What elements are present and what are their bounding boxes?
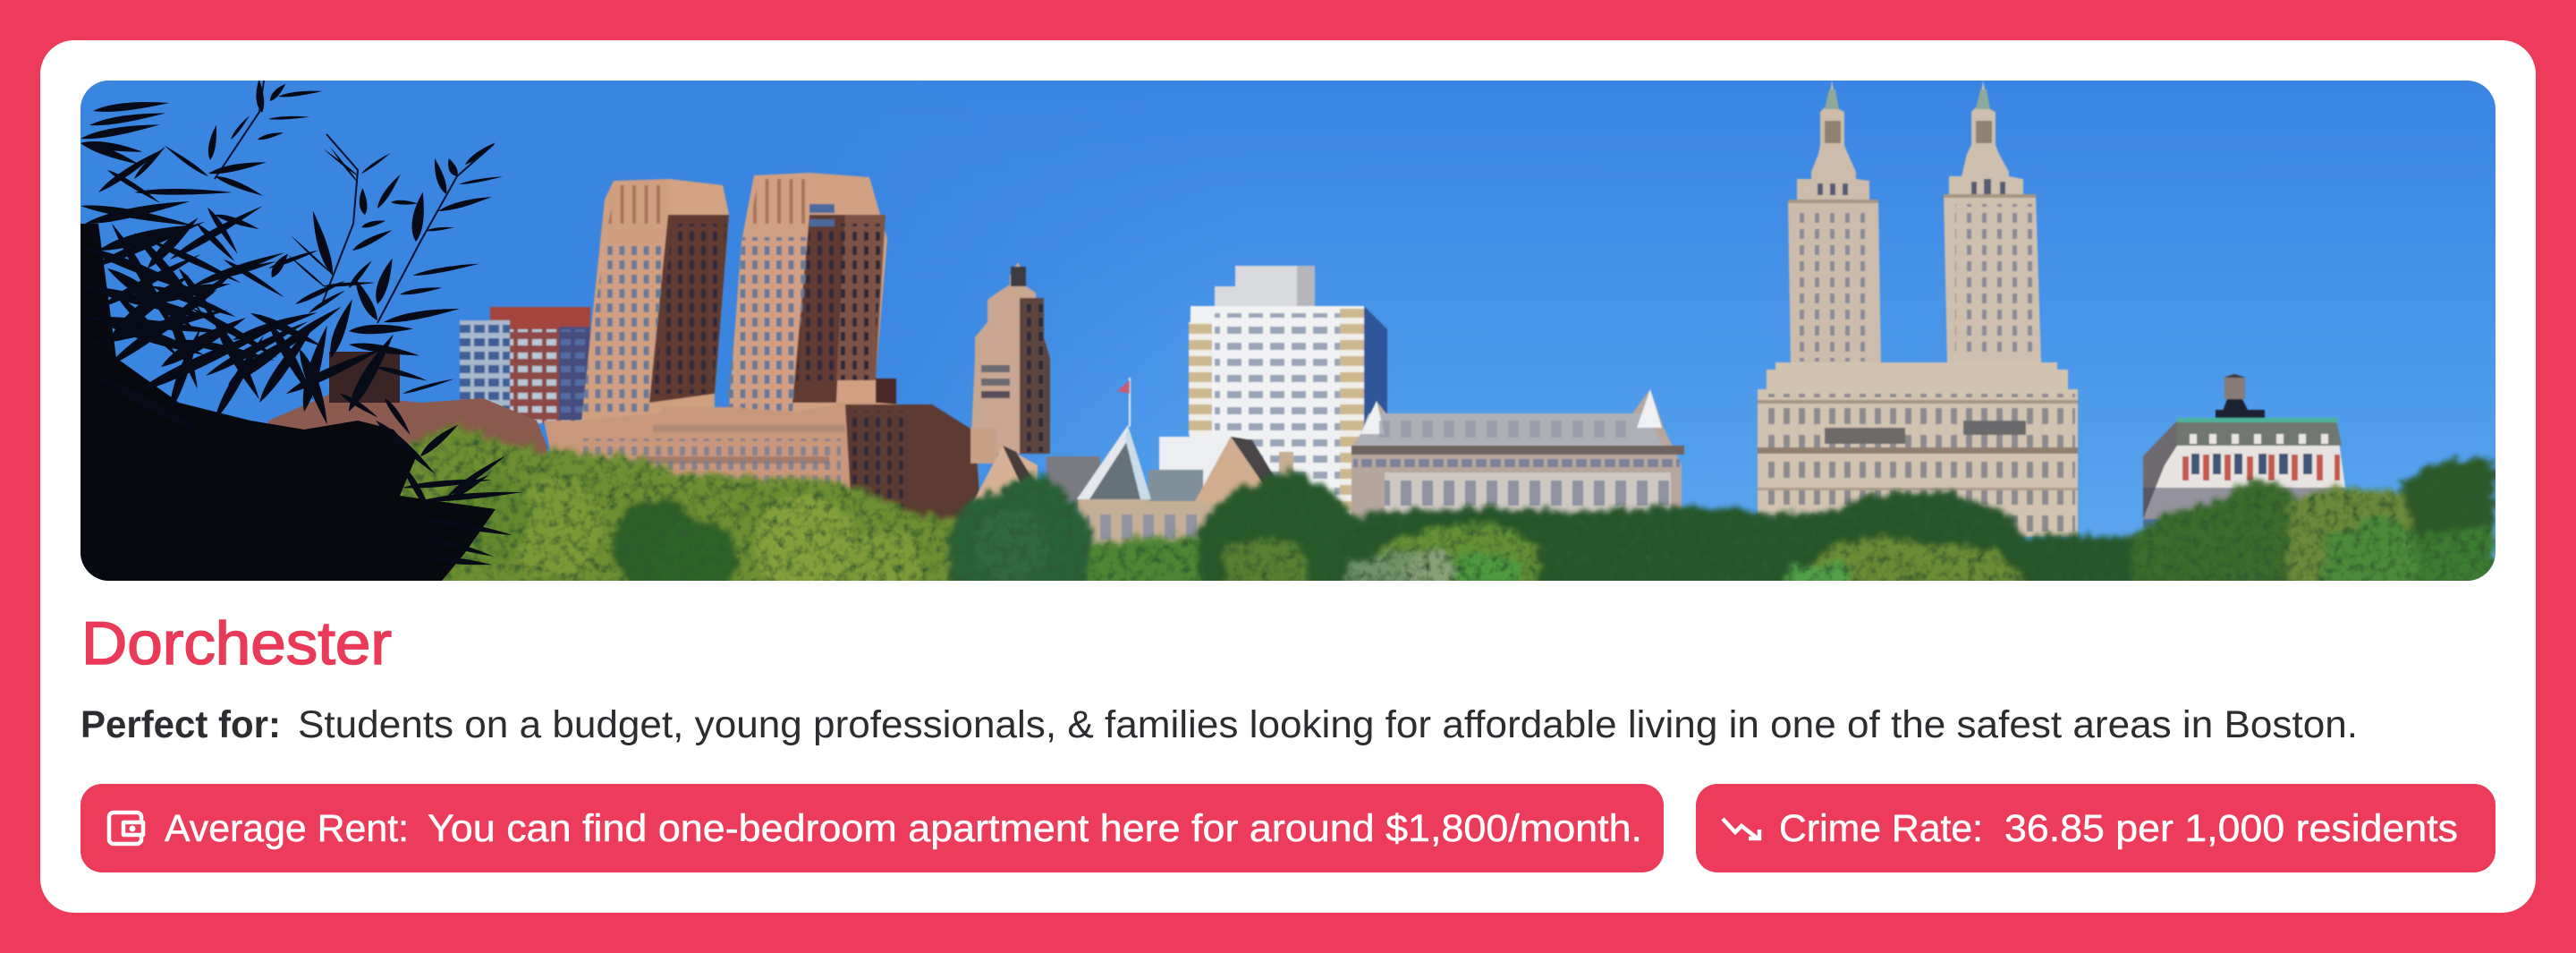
building: art deco twin towers <box>580 172 897 421</box>
callout: crime rate <box>1696 784 2496 872</box>
callout: crime rate: Crime Rate: <box>1779 807 1983 850</box>
building: low brown block <box>268 394 547 458</box>
photo: Central Park skyline <box>79 79 2496 602</box>
building: blue and red tower <box>460 307 590 423</box>
text block: perfect for: Students on a budget, young professionals, & families looking for affordable living in one of the safest areas in Boston. <box>298 703 2358 746</box>
building: green-roof block with water tower <box>2143 374 2345 528</box>
building: San Remo twin towers <box>1758 81 2078 537</box>
callout: crime rate: 36.85 per 1,000 residents <box>2004 807 2458 850</box>
building: stepped base <box>544 402 980 524</box>
trees: park canopy <box>400 419 2496 581</box>
plant: dark bamboo silhouette <box>79 79 523 581</box>
callout: average rent <box>80 784 1664 872</box>
building: mansard apartment block <box>1352 389 1684 537</box>
icon: wallet <box>109 813 143 844</box>
building: clock tower <box>970 262 1050 464</box>
icon: trending down <box>1723 819 1759 838</box>
callout: average rent: Average Rent: <box>165 807 409 850</box>
building: Dakota-style chateau <box>964 378 1293 555</box>
text block: perfect for: Perfect for: <box>80 703 281 746</box>
callout: average rent: You can find one-bedroom apartment here for around $1,800/month. <box>428 807 1642 850</box>
building: white high-rise <box>1159 266 1387 537</box>
heading: neighbourhood name: Dorchester <box>81 609 392 677</box>
